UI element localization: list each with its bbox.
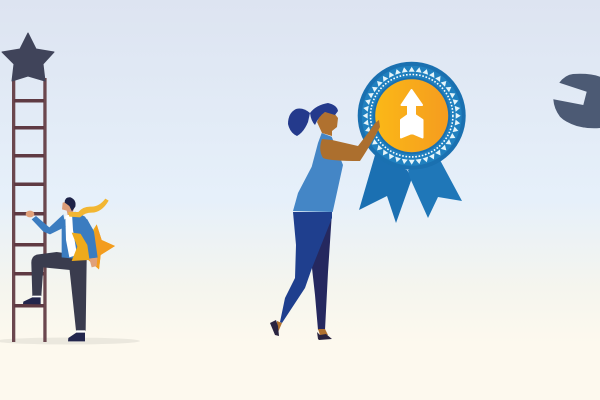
woman: head and neck — [317, 112, 338, 136]
ground shadow — [0, 338, 140, 344]
medal: outer disc — [358, 62, 466, 170]
woman: back foot — [318, 329, 328, 335]
woman: front leg — [280, 212, 332, 323]
ladder — [12, 78, 47, 342]
man: shirt — [65, 213, 77, 257]
man: raised leg — [31, 252, 86, 296]
woman: front shoe — [270, 320, 279, 336]
man: neck and face — [62, 201, 74, 215]
woman: arm — [320, 120, 380, 161]
man: star shade — [88, 224, 115, 269]
medal: right ribbon tail — [408, 160, 462, 218]
icon: wrench — [553, 74, 600, 128]
woman: front foot — [277, 321, 282, 334]
man climbing ladder — [23, 197, 115, 341]
man: standing foot sock — [76, 330, 85, 333]
woman: ponytail — [288, 108, 310, 136]
man: standing foot shoe — [68, 333, 85, 341]
woman: hair — [310, 103, 338, 125]
man: hand on rung — [26, 211, 34, 217]
man: jacket body — [62, 212, 98, 259]
man: hair — [65, 197, 76, 211]
ribbon medal — [358, 62, 466, 223]
man: hand at star — [89, 258, 97, 267]
man: carrying arm — [78, 215, 98, 259]
medal: gold centre — [375, 79, 448, 152]
man: raised foot sock — [33, 296, 41, 298]
man: star carried — [72, 224, 115, 269]
medal: dotted ring — [370, 74, 453, 157]
woman: back shoe — [317, 332, 332, 340]
medal: inner band — [362, 66, 462, 166]
man: standing leg — [68, 258, 87, 331]
medal: thin ring — [373, 77, 450, 154]
medal: left ribbon tail — [359, 155, 412, 223]
man: flying tie — [68, 199, 109, 217]
woman: back leg — [300, 212, 332, 330]
icon: white arrow — [401, 90, 422, 138]
medal: notched triangles ring — [363, 67, 461, 165]
icon: star on top of ladder — [2, 33, 54, 81]
man: front arm — [32, 214, 66, 234]
woman holding medal — [270, 103, 380, 340]
man: raised foot shoe — [23, 297, 41, 304]
woman: blue top — [293, 133, 343, 212]
